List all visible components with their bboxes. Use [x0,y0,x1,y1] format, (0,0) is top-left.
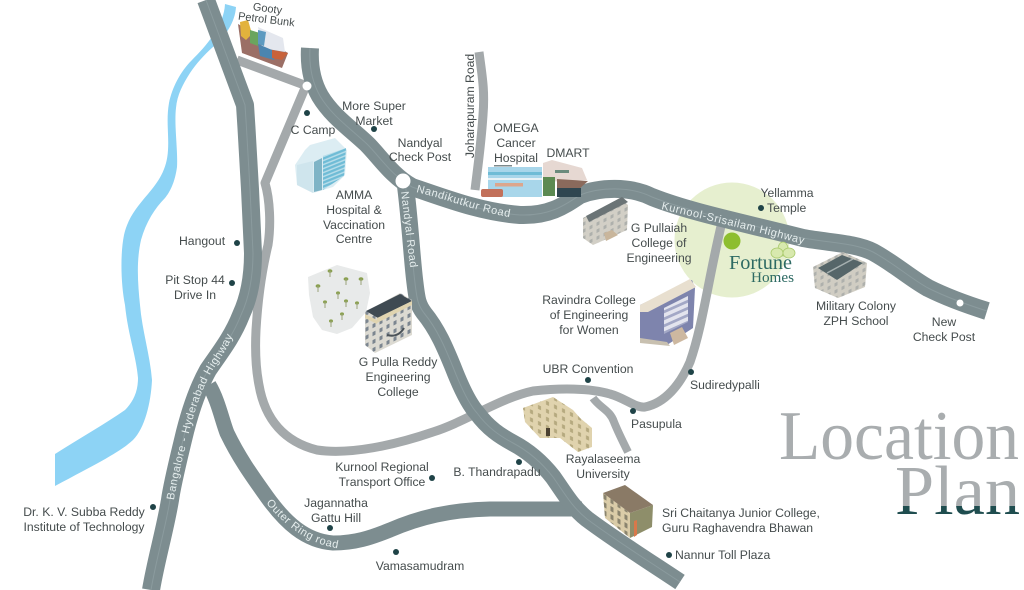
road label: Outer Ring road: Outer Ring road [268,500,338,548]
road label: Bangalore - Hyderabad Highway: Bangalore - Hyderabad Highway [166,334,234,500]
location marker: Fortune Homes [724,232,740,250]
label: Pasupula: Pasupula [631,417,682,431]
junction: Gooty roundabout [302,82,312,90]
label: Vamasamudram: Vamasamudram [376,559,464,573]
label: Military Colony ZPH School [816,299,897,328]
label: Pit Stop 44 Drive In [165,273,235,302]
icon: Gooty Petrol Bunk building [238,20,288,68]
label: Jagannatha Gattu Hill [304,496,368,531]
label: DMART: DMART [546,146,590,160]
label: Ravindra College of Engineering for Women: Ravindra College [542,293,636,307]
label: OMEGA Cancer Hospital: OMEGA [493,121,540,135]
label: Jagannatha Gattu Hill: Gattu Hill [311,511,361,525]
title: Location Plan: Plan [895,453,1020,530]
title: Location Plan [779,398,1020,530]
label: Sri Chaitanya Junior College, Guru Raghavendra Bhawan: Sri Chaitanya Junior College, [662,506,820,520]
label: Yellamma Temple: Yellamma [760,186,814,200]
label: G Pulla Reddy Engineering College: College [377,385,419,399]
road: Outer Ring road [209,385,582,543]
junction: New Check Post [956,300,964,306]
label: Rayalaseema University [566,452,640,481]
label: Rayalaseema University: University [576,467,631,481]
icon: Sri Chaitanya College building [603,485,653,538]
label: Gooty Petrol Bunk: Gooty [252,1,283,17]
label: AMMA Hospital & Vaccination Centre [323,188,385,246]
label: Gooty Petrol Bunk [237,1,296,30]
road: Nandikutkur Road and Kurnool-Srisailam Highway [310,48,987,311]
road label: Nandyal Road: Nandyal Road [401,192,418,268]
road label: Nandikutkur Road: Nandikutkur Road [416,184,510,217]
label: OMEGA Cancer Hospital: Hospital [494,151,538,165]
label: G Pulla Reddy Engineering College: G Pulla Reddy [359,355,438,369]
label: Sudiredypalli [688,369,760,392]
label: AMMA Hospital & Vaccination Centre: Hospital & [326,203,382,217]
title: Location Plan: Location [779,398,1019,475]
icon: Military Colony ZPH School building [813,252,867,298]
label: Military Colony ZPH School: ZPH School [823,314,889,328]
label: Sri Chaitanya Junior College, Guru Raghavendra Bhawan [662,506,820,535]
icon: leaf [771,242,795,258]
label: Rayalaseema University: Rayalaseema [566,452,640,466]
label: More Super Market: More Super [342,99,406,113]
label: G Pullaiah College of Engineering: G Pullaiah [631,221,687,235]
icon: Ravindra College building [640,279,696,346]
label: More Super Market [342,99,406,132]
label: Nandyal Check Post: Nandyal [398,136,442,150]
logo: Fortune Homes: Homes [751,270,794,286]
label: More Super Market: Market [355,114,393,128]
label: Nannur Toll Plaza: Nannur Toll Plaza [675,548,771,562]
icon: G Pulla Reddy College building [365,293,412,353]
label: C Camp [291,110,336,137]
label: Yellamma Temple: Temple [767,201,807,215]
icon: AMMA Hospital building [295,138,347,193]
logo: Fortune Homes [729,242,795,286]
label: Pasupula [630,408,682,431]
label: C Camp: C Camp [291,123,336,137]
icon: G Pullaiah College building [583,197,628,245]
label: Kurnool Regional Transport Office: Transport Office [339,475,426,489]
label: B. Thandrapadu: B. Thandrapadu [453,465,541,479]
road: inner grey ring [256,88,722,451]
icon: Rayalaseema University building [523,397,592,452]
label: Pit Stop 44 Drive In: Drive In [174,288,216,302]
label: Nandyal Check Post: Check Post [389,150,452,164]
road: University branch [593,398,628,452]
label: UBR Convention: UBR Convention [543,362,633,376]
road: Gooty branch [237,60,307,86]
label: G Pullaiah College of Engineering [626,221,692,265]
label: New Check Post [913,315,976,344]
logo: Fortune Homes: Fortune [729,252,792,274]
label: Dr. K. V. Subba Reddy Institute of Technology: Dr. K. V. Subba Reddy [23,505,146,519]
label: Dr. K. V. Subba Reddy Institute of Technology: Institute of Technology [23,520,145,534]
label: AMMA Hospital & Vaccination Centre: Vaccination [323,218,385,232]
road: Bangalore - Hyderabad Highway [151,0,253,590]
label: Dr. K. V. Subba Reddy Institute of Technology [23,504,156,534]
label: Kurnool Regional Transport Office [335,460,435,489]
label: Ravindra College of Engineering for Women: for Women [559,323,619,337]
label: OMEGA Cancer Hospital: Cancer [496,136,536,150]
label: G Pulla Reddy Engineering College: Engineering [365,370,431,384]
label: AMMA Hospital & Vaccination Centre: AMMA [336,188,373,202]
label: Jagannatha Gattu Hill: Jagannatha [304,496,368,510]
icon: DMART building [543,160,588,197]
label: Ravindra College of Engineering for Women: of Engineering [550,308,628,322]
label: G Pullaiah College of Engineering: College of [632,236,687,250]
river [55,4,236,486]
label: Hangout: Hangout [179,234,226,248]
label: Nandyal Check Post [389,136,452,164]
label: OMEGA Cancer Hospital [493,121,540,165]
label: Ravindra College of Engineering for Women [542,293,636,337]
label: G Pulla Reddy Engineering College [359,355,438,399]
icon: OMEGA Cancer Hospital building [481,165,542,197]
label: Pit Stop 44 Drive In: Pit Stop 44 [165,273,225,287]
label: New Check Post: New [932,315,956,329]
road: Nandyal Road [405,182,680,582]
Fortune Homes site circle [674,182,790,298]
junction: Nandyal Check Post roundabout [396,174,410,188]
label: G Pullaiah College of Engineering: Engineering [626,251,692,265]
label: Sri Chaitanya Junior College, Guru Raghavendra Bhawan: Guru Raghavendra Bhawan [662,521,813,535]
label: Sudiredypalli: Sudiredypalli [690,378,760,392]
road label: Kurnool-Srisailam Highway: Kurnool-Srisailam Highway [662,202,805,246]
label: Military Colony ZPH School: Military Colony [816,299,897,313]
label: New Check Post: Check Post [913,330,976,344]
label: Kurnool Regional Transport Office: Kurnool Regional [335,460,429,474]
road: Joharapuram Road [475,52,484,190]
label: Yellamma Temple [758,186,814,215]
label: Vamasamudram [376,549,464,573]
label: AMMA Hospital & Vaccination Centre: Centre [336,232,373,246]
road label: Joharapuram Road: Joharapuram Road [463,54,477,158]
icon: G Pulla Reddy campus greenery [308,265,370,334]
label: Gooty Petrol Bunk: Petrol Bunk [237,11,296,30]
label: UBR Convention [543,362,633,383]
